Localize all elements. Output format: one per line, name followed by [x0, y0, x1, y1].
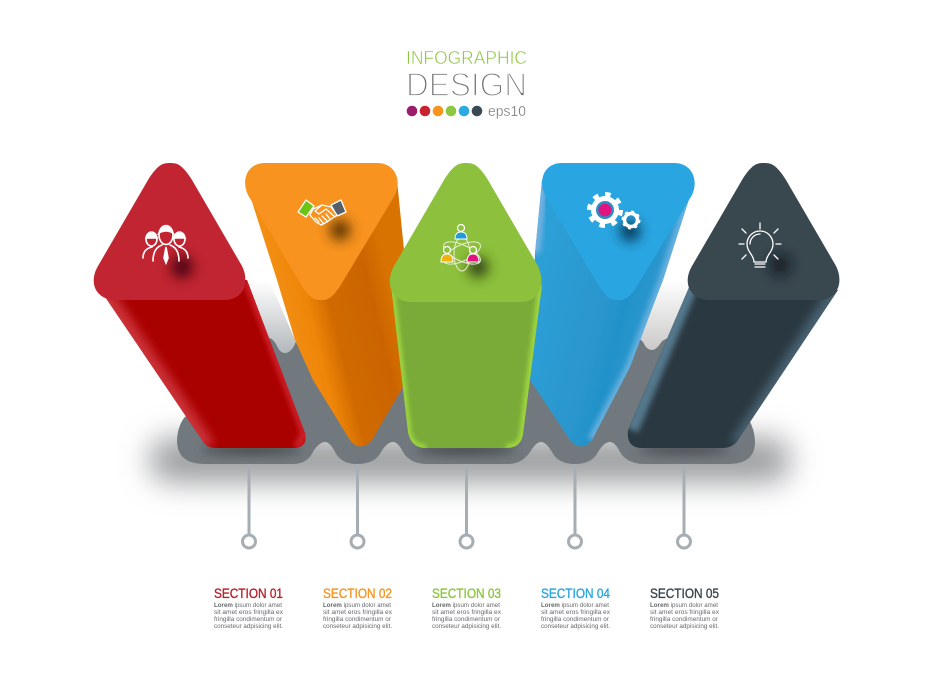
section 02 text: Lorem ipsum dolor amet: [323, 602, 394, 609]
section 01 text: Lorem ipsum dolor amet: [214, 602, 285, 609]
section 05: [650, 586, 720, 630]
section 05 text: fringilla condimentum or: [650, 616, 719, 623]
section 04 text: Lorem ipsum dolor amet: [541, 602, 612, 609]
section 03 text: sit amet eros fringilla ex: [432, 609, 502, 616]
section 04 text: sit amet eros fringilla ex: [541, 609, 611, 616]
gap shadow right: [634, 280, 692, 356]
red body: [106, 280, 306, 448]
icon: handshake: [298, 200, 346, 225]
panel: green prism: [385, 163, 550, 455]
red top face: [94, 163, 245, 300]
orange top face: [245, 163, 398, 300]
section 03 text: conseteur adpisicing elit.: [432, 623, 501, 630]
section 02 heading: SECTION 02: [323, 586, 392, 601]
section 03: [432, 586, 502, 630]
orange body: [245, 180, 404, 446]
icon shadow: [620, 221, 640, 241]
section 01 heading: SECTION 01: [214, 586, 283, 601]
blue top face: [542, 163, 695, 300]
section 01 text: conseteur adpisicing elit.: [214, 623, 283, 630]
green top face: [390, 163, 541, 302]
section 05 text: Lorem ipsum dolor amet: [650, 602, 721, 609]
section 04 text: conseteur adpisicing elit.: [541, 623, 610, 630]
section 05 heading: SECTION 05: [650, 586, 719, 601]
section 01 text: sit amet eros fringilla ex: [214, 609, 284, 616]
section 04 text: fringilla condimentum or: [541, 616, 610, 623]
icon: light bulb: [739, 223, 781, 267]
dark body: [628, 288, 838, 448]
section 03 text: Lorem ipsum dolor amet: [432, 602, 503, 609]
colour dots: [407, 106, 482, 116]
section 05 text: sit amet eros fringilla ex: [650, 609, 720, 616]
panel: orange prism: [245, 163, 404, 446]
section 02 text: sit amet eros fringilla ex: [323, 609, 393, 616]
title: [406, 47, 527, 120]
section 01: [214, 586, 284, 630]
section 03 heading: SECTION 03: [432, 586, 501, 601]
icon shadow: [770, 255, 790, 275]
blue body: [530, 180, 689, 446]
icon: atom with people: [440, 224, 484, 271]
icon: people: [143, 226, 188, 263]
section 04 heading: SECTION 04: [541, 586, 610, 601]
icon shadow: [171, 256, 193, 278]
section 02 text: conseteur adpisicing elit.: [323, 623, 392, 630]
icon: gears: [590, 194, 639, 228]
section 02 text: fringilla condimentum or: [323, 616, 392, 623]
dark top face: [688, 163, 839, 300]
heading: infographic: INFOGRAPHIC: [406, 47, 527, 68]
section 05 text: conseteur adpisicing elit.: [650, 623, 719, 630]
connector stems: [242, 464, 690, 548]
stem 3: [460, 464, 473, 548]
section 01 text: fringilla condimentum or: [214, 616, 283, 623]
stem 2: [351, 464, 364, 548]
connector base: [177, 338, 755, 464]
green body: [392, 285, 542, 448]
icon shadow: [330, 220, 350, 240]
icon shadow: [468, 257, 488, 277]
stem 5: [678, 464, 690, 548]
infographic: [94, 51, 840, 630]
panel: blue prism: [525, 163, 700, 455]
floor shadow: [150, 438, 790, 482]
panel: dark prism: [620, 163, 845, 455]
heading: design: DESIGN: [406, 66, 527, 103]
section 03 text: fringilla condimentum or: [432, 616, 501, 623]
section 04: [541, 586, 611, 630]
stem 1: [242, 464, 256, 548]
gap shadow left: [248, 282, 302, 356]
stem 4: [568, 464, 582, 548]
panel: red prism: [90, 163, 315, 455]
section 02: [323, 586, 393, 630]
version label: eps10: [488, 103, 526, 120]
